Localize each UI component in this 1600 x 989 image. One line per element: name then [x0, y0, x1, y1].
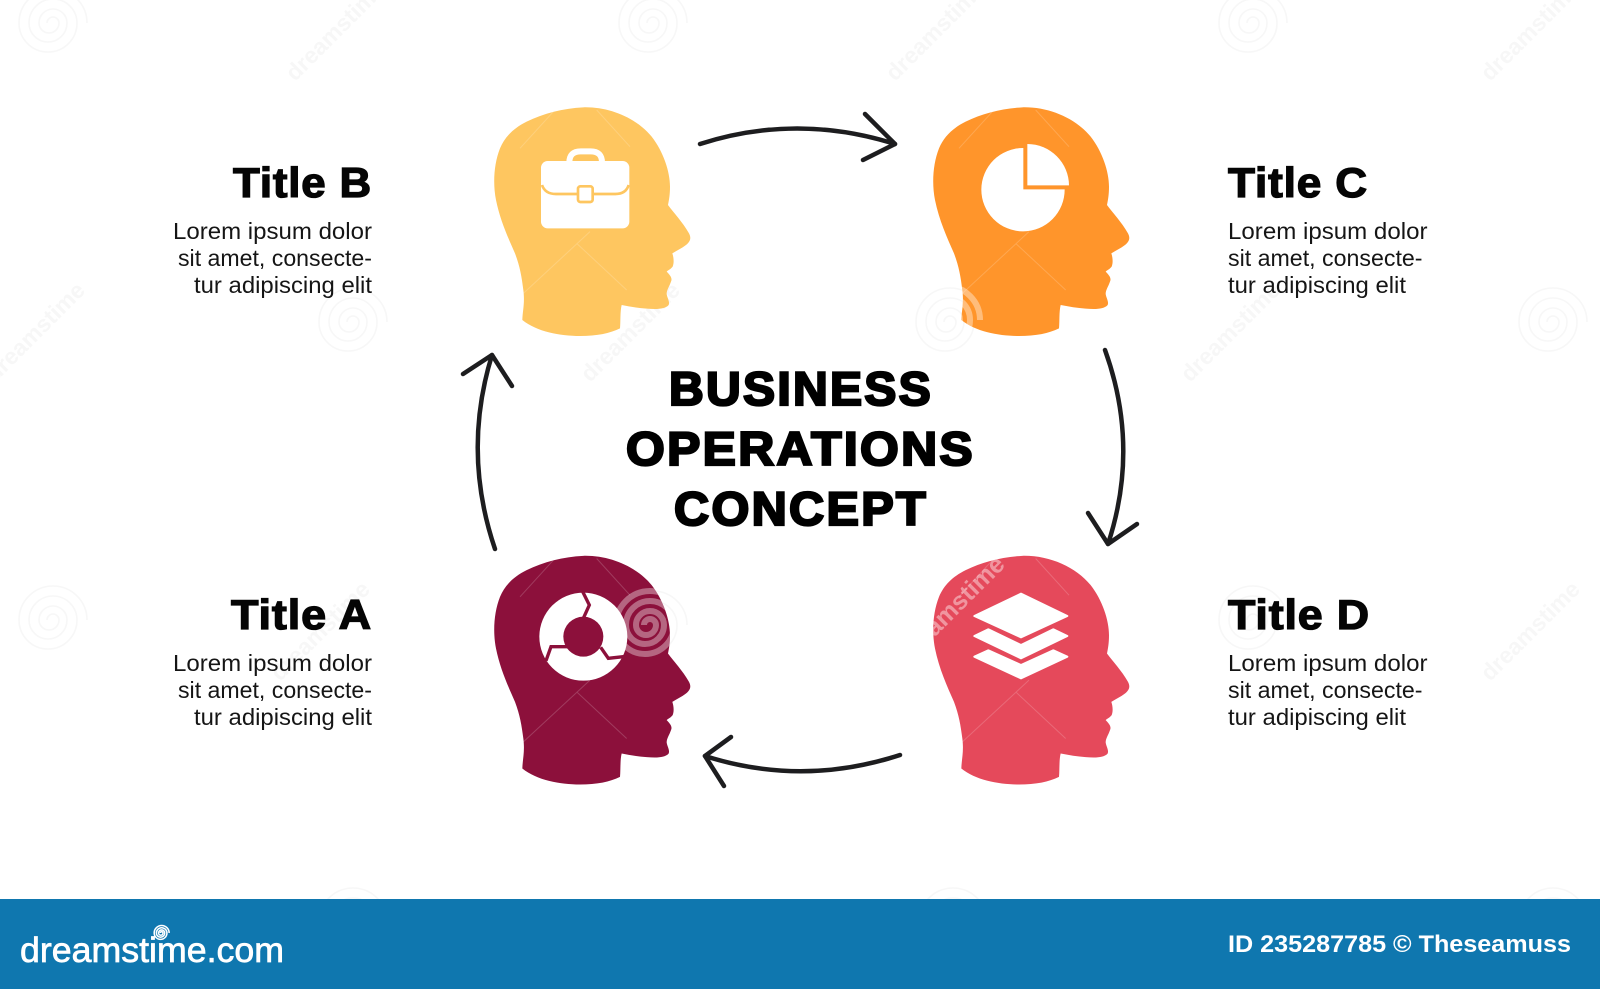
- panel: Title C: [1228, 159, 1428, 298]
- text block: Title A description: [173, 650, 373, 730]
- text block: Title B description: [173, 218, 373, 298]
- head D: red with layers: dreamstime: [891, 550, 1011, 669]
- center title: OPERATIONS: [626, 422, 975, 475]
- logo: dreamstime.com: dreamstime.com: [20, 931, 284, 970]
- heading: Title D: Title D: [1228, 591, 1370, 638]
- text block: Title C description: sit amet, consecte-: [1228, 245, 1422, 271]
- watermark pattern: dreamstime: [575, 277, 685, 387]
- center title: CONCEPT: [674, 482, 928, 535]
- text block: Title C description: [1228, 218, 1428, 298]
- arrow: B to C: [700, 114, 895, 160]
- watermark pattern: dreamstime: [1175, 277, 1285, 387]
- text block: Title A description: sit amet, consecte-: [178, 677, 372, 703]
- head B: yellow with briefcase: [494, 107, 690, 336]
- text block: Title C description: tur adipiscing elit: [1228, 272, 1407, 298]
- text block: Title D description: tur adipiscing elit: [1228, 704, 1407, 730]
- panel: Title D: [1228, 591, 1428, 730]
- footer bar: [0, 899, 1600, 989]
- icon: cycle ring: [539, 592, 627, 681]
- watermark pattern: dreamstime: [1475, 576, 1585, 686]
- text block: Title C description: Lorem ipsum dolor: [1228, 218, 1428, 244]
- center title: [626, 362, 975, 535]
- text block: Title D description: Lorem ipsum dolor: [1228, 650, 1428, 676]
- head C: orange with pie chart: [933, 107, 1130, 336]
- heading: Title B: Title B: [233, 159, 372, 206]
- arrow: D to A: [705, 737, 900, 786]
- arrow: A to B: [463, 355, 512, 549]
- panel: Title A: [173, 591, 373, 730]
- icon: layers: [974, 594, 1067, 678]
- text block: Title B description: tur adipiscing elit: [194, 272, 373, 298]
- text block: Title A description: Lorem ipsum dolor: [173, 650, 372, 676]
- text block: Title A description: tur adipiscing elit: [194, 704, 373, 730]
- heading: Title C: Title C: [1228, 159, 1368, 206]
- head A: maroon with cycle ring: [494, 556, 690, 784]
- center title: BUSINESS: [669, 362, 933, 415]
- text block: Title B description: Lorem ipsum dolor: [173, 218, 372, 244]
- heading: Title A: Title A: [231, 591, 372, 638]
- watermark pattern: dreamstime: [265, 576, 375, 686]
- text block: Title D description: sit amet, consecte-: [1228, 677, 1422, 703]
- text block: Title B description: sit amet, consecte-: [178, 245, 372, 271]
- icon: pie chart: [981, 144, 1069, 231]
- head D: red with layers: [933, 556, 1130, 784]
- arrow: C to D: [1088, 350, 1137, 544]
- text block: Title D description: [1228, 650, 1428, 730]
- panel: Title B: [173, 159, 373, 298]
- credit text: ID 235287785 © Theseamuss: [1228, 931, 1571, 958]
- icon: briefcase: [541, 151, 629, 228]
